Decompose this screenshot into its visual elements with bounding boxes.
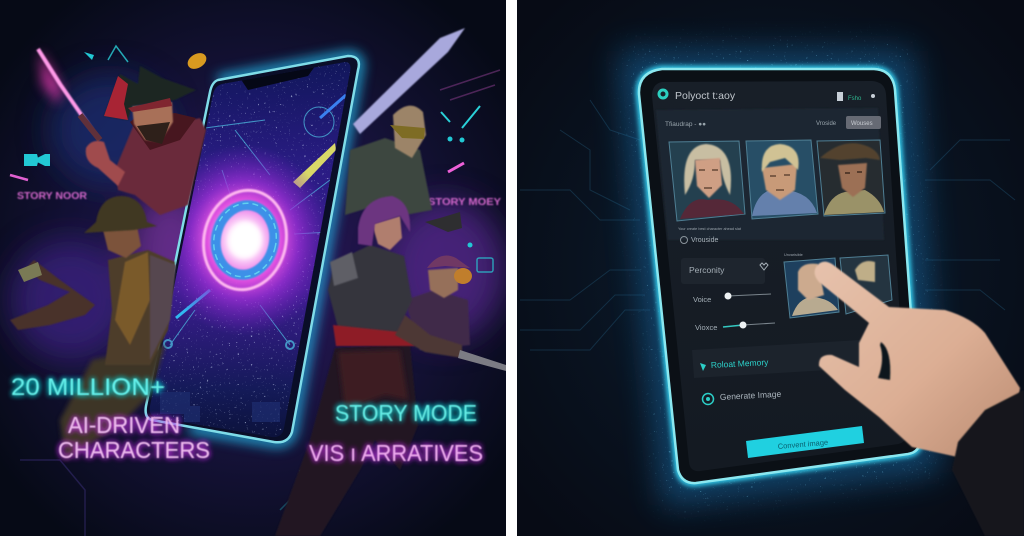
portrait card: woman with hat [817,140,885,216]
stat: 20 million: 20 MILLION+ [11,374,165,401]
voice slider: Voice [693,295,711,304]
character: pirate with glowing blade [38,49,206,215]
label: characters: CHARACTERS [58,437,210,463]
woman sword arm [395,315,462,358]
app title: Polyoct t:aoy [675,90,736,102]
character: small man with cap [405,256,472,350]
generate image row [702,389,782,404]
pirate face [132,102,173,142]
subtitle text: Tfiaudrap - ●● [665,121,706,128]
tab label: Vroside [816,121,837,127]
voices slider: Vioxce [695,323,717,332]
logo ring [659,90,667,98]
man hand [425,212,462,232]
small pink story label left: STORY NOOR [17,191,88,202]
tablet [639,69,920,483]
right background [517,0,1024,536]
woman hair [358,196,410,246]
yellow stripes [293,143,336,188]
woman gun [458,350,506,371]
preview card two [840,255,892,314]
pirate raised hand [86,141,125,186]
preview card one [784,258,839,318]
icon: cyan leaf and dots [84,52,472,248]
soldier legs [60,345,165,460]
memory row: Roloat Memory [711,357,769,370]
memory row [692,340,862,378]
character section panel [656,108,884,240]
bald man body [345,138,432,215]
active tab [846,116,881,129]
header icons [837,92,843,101]
small preview label: Unvarisible [784,253,803,257]
glowing energy core [174,148,324,332]
character: soldier [10,196,176,460]
particle sparkle around tablet [517,0,1024,536]
nebula glow [10,75,505,360]
phone [140,50,370,450]
soldier helmet [84,196,157,233]
soldier arms [10,260,95,330]
pirate body [115,118,206,215]
screen gradient [150,62,350,437]
radio label: Vrouside [691,237,718,244]
hand shape [815,262,1020,458]
screen thumbnails [160,392,280,422]
circuit traces [520,100,1015,350]
personality setting row: Perconity [689,265,725,275]
header label: Fsho [848,96,862,102]
generate button [746,426,864,458]
icon: gold coin [188,53,206,69]
portrait card: woman [669,141,745,221]
decorative circuit icons and accents [10,46,500,536]
tablet neon halo [639,69,920,483]
label: story mode: STORY MODE [335,400,477,426]
sleeve [952,390,1024,536]
soldier face [103,226,141,258]
goggles [390,125,425,139]
character: bald man with goggles and sword [345,28,465,232]
generate image row: Generate Image [720,389,782,402]
panel: right tablet interface [517,0,1024,536]
small caption: Your create best character ahead slat [678,227,742,231]
target rings [201,188,289,292]
label: AI-driven: AI-DRIVEN [68,412,180,438]
app title bar [659,90,875,102]
woman torso armor [328,245,412,335]
tablet body [639,69,920,483]
bald head [393,106,426,158]
left background [0,0,506,536]
blue stripe accents [320,95,346,118]
woman legs [275,345,418,536]
generate button: Convent image [777,438,828,451]
header dot [871,94,875,98]
phone frame [146,56,359,442]
phone screen [150,62,350,437]
portrait card: blond man [746,140,818,219]
icon: play badge [24,154,50,166]
tablet screen [652,81,907,471]
gap between fingers [878,342,890,380]
woman face [372,216,402,250]
glowing blade [38,49,100,140]
blue glow around tablet [640,70,920,485]
character: purple-haired woman [275,196,506,536]
active tab: Wouses [851,121,873,127]
notch [242,68,314,90]
hand pointing at tablet [815,262,1024,536]
small pink story label right: STORY MOEY [428,196,501,208]
radio label [680,236,718,244]
soldier torso [105,250,175,365]
label: visual narratives: VIS ı ARRATIVES [309,440,483,466]
pirate hat [104,66,196,120]
screen stars [152,62,350,436]
phone neon halo [190,56,359,442]
voices slider [695,322,775,332]
silver sword [353,28,465,134]
screen circuit details [164,107,334,349]
voice slider [693,292,771,304]
panel: left game characters poster [0,0,506,536]
red belt [333,325,415,346]
gun in hand [18,262,42,282]
personality setting row [681,258,768,284]
